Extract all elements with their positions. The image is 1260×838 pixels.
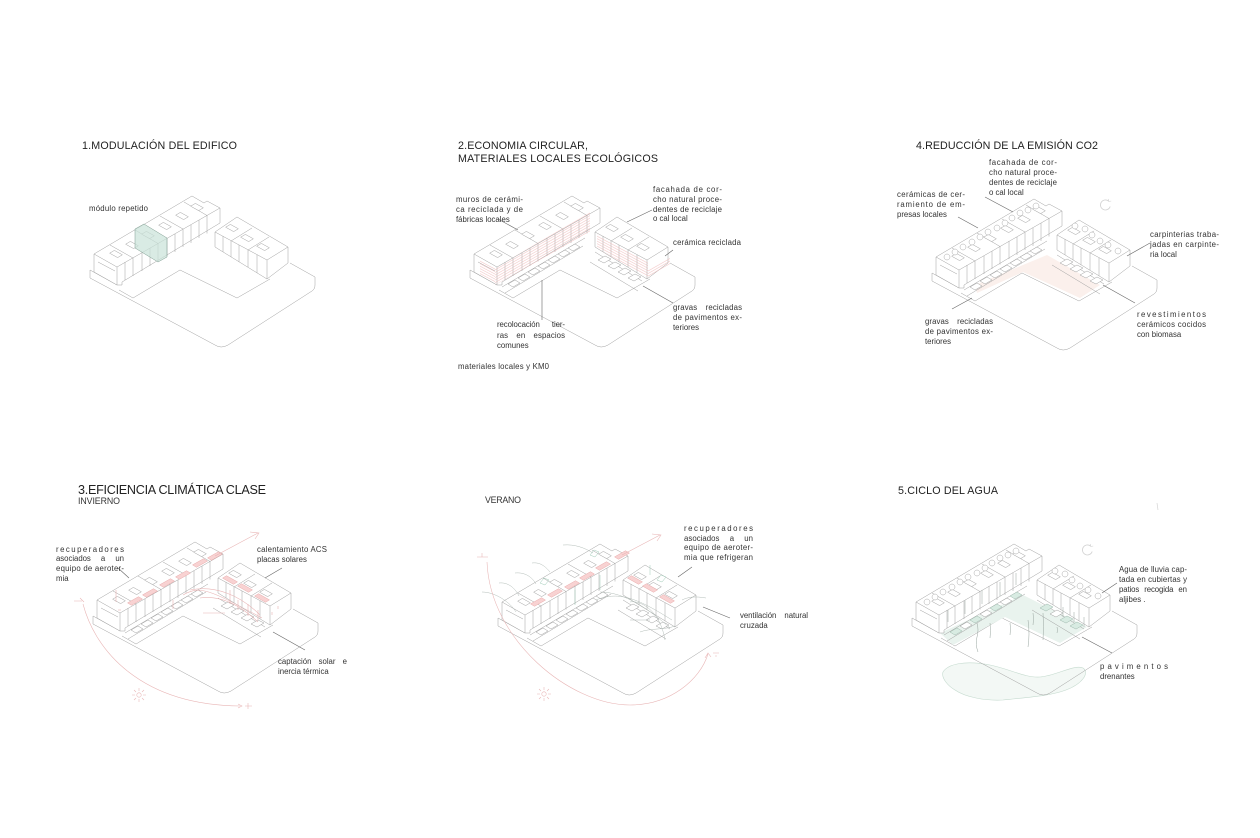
label: recuperadores: recuperadores (56, 545, 124, 554)
icon: sun (537, 687, 551, 701)
label: captación solar: inercia térmica (278, 667, 329, 676)
label: muros de cerámica: fábricas locales (456, 215, 510, 224)
label: gravas recicladas: teriores (673, 323, 699, 332)
label: fachada de corcho: facahada de cor- (653, 185, 722, 194)
label: revestimientos: revestimientos (1137, 310, 1206, 319)
label: revestimientos: cerámicos cocidos (1137, 320, 1206, 329)
label: cerámicas de cerramiento: cerámicas de cer- (897, 190, 965, 199)
panel: 2 economía circular (456, 140, 742, 371)
label: recolocación tierras: recolocación tier- (497, 320, 565, 329)
label: fachada de corcho: o cal local (653, 214, 688, 223)
heading: modulación: 1.MODULACIÓN DEL EDIFICO (82, 139, 237, 152)
label: gravas recicladas: teriores (925, 337, 951, 346)
arc: winter sun path (74, 598, 252, 709)
ventilation arrows (482, 545, 706, 640)
label: recolocación tierras: ras en espacios (497, 331, 565, 340)
panel: 3 eficiencia climática invierno (56, 482, 347, 709)
label: fachada de corcho: facahada de cor- (989, 158, 1057, 167)
label: muros de cerámica: muros de cerámi- (456, 195, 523, 204)
panel: 5 ciclo del agua (898, 485, 1187, 700)
label: fachada de corcho: o cal local (989, 188, 1024, 197)
rain drainage lines (948, 573, 1084, 652)
drawing: CO2 axonometric (932, 199, 1157, 350)
label: fachada de corcho: dentes de reciclaje (653, 205, 722, 214)
drawing: summer axonometric (498, 544, 723, 695)
drawing: materials axonometric (470, 196, 695, 347)
subheading: invierno: INVIERNO (78, 496, 120, 506)
drawing: axonometric building (90, 196, 315, 347)
label: recolocación tierras (497, 320, 565, 350)
heading: eficiencia climática: 3.EFICIENCIA CLIMÁTICA CLASE (78, 482, 266, 497)
label: recuperadores (684, 524, 753, 562)
label: agua de lluvia: Agua de lluvia cap- (1119, 565, 1187, 574)
drawing: water axonometric (912, 544, 1137, 695)
label: fachada de corcho (653, 185, 722, 223)
label: agua de lluvia (1119, 565, 1187, 604)
label: recuperadores (56, 545, 124, 583)
leader lines (498, 210, 673, 320)
icon: recycle arrow (1100, 199, 1111, 210)
label: ventilación: ventilación natural (740, 611, 808, 620)
leader lines (118, 568, 305, 650)
label: fachada de corcho: dentes de reciclaje (989, 178, 1057, 187)
label: cerámicas de cerramiento: presas locales (897, 210, 947, 219)
label: gravas recicladas (673, 303, 742, 332)
shape: aquifer blob (943, 663, 1086, 700)
label: muros de cerámica (456, 195, 523, 224)
label: agua de lluvia: patios recogida en (1119, 585, 1187, 594)
label: gravas recicladas: de pavimentos ex- (673, 313, 742, 322)
label: recolocación tierras: comunes (497, 341, 529, 350)
label: carpinterías: ria local (1150, 250, 1177, 259)
label: ventilación: cruzada (740, 621, 768, 630)
label: calentamiento ACS: placas solares (257, 555, 307, 564)
leader lines (1082, 583, 1117, 653)
arc: summer sun path (477, 553, 719, 705)
label: revestimientos: con biomasa (1137, 330, 1182, 339)
leader lines (678, 567, 730, 618)
label: carpinterías: jadas en carpinte- (1149, 240, 1219, 249)
label: recuperadores: recuperadores (684, 524, 753, 533)
label: revestimientos (1137, 310, 1206, 339)
label: fachada de corcho: cho natural proce- (653, 195, 722, 204)
green patios (950, 592, 1083, 635)
heading: economía circular: 2.ECONOMIA CIRCULAR, (458, 140, 588, 152)
label: recuperadores: equipo de aeroter- (684, 543, 753, 552)
label: muros de cerámica: ca reciclada y de (456, 205, 523, 214)
label: cerámica reciclada: cerámica reciclada (673, 238, 742, 247)
label: módulo repetido: módulo repetido (89, 204, 149, 213)
heading: reducción CO2: 4.REDUCCIÓN DE LA EMISIÓN CO2 (916, 139, 1098, 152)
label: pavimentos drenantes (1100, 662, 1168, 681)
leader lines (952, 197, 1150, 309)
highlighted green module (135, 224, 167, 262)
label: pavimentos drenantes: pavimentos (1100, 662, 1168, 671)
label: fachada de corcho (989, 158, 1057, 197)
label: cerámicas de cerramiento: ramiento de em- (897, 200, 965, 209)
heading: economía circular: MATERIALES LOCALES ECOLÓGICOS (458, 152, 658, 165)
label: gravas recicladas: gravas recicladas (673, 303, 742, 312)
label: carpinterías: carpinterias traba- (1150, 230, 1219, 239)
label: recuperadores: mia (56, 574, 69, 583)
label: cerámicas de cerramiento (897, 190, 965, 219)
drawing: winter axonometric (93, 542, 318, 693)
label: calentamiento ACS (257, 545, 327, 564)
red solar panels (116, 532, 278, 622)
label: agua de lluvia: tada en cubiertas y (1119, 575, 1187, 584)
panel: 4 reducción emisión CO2 (897, 139, 1219, 350)
label: gravas recicladas: de pavimentos ex- (925, 327, 993, 336)
label: calentamiento ACS: calentamiento ACS (257, 545, 327, 554)
label: recuperadores: mia que refrigeran (684, 553, 753, 562)
heading: ciclo del agua: 5.CICLO DEL AGUA (898, 485, 999, 497)
panel: verano (477, 495, 808, 705)
label: gravas recicladas (925, 317, 993, 346)
small mark (1157, 503, 1158, 510)
label: carpinterías (1149, 230, 1219, 259)
label: gravas recicladas: gravas recicladas (925, 317, 993, 326)
icon: sun (132, 688, 146, 702)
label: recuperadores: equipo de aeroter- (56, 564, 124, 573)
label: ventilación (740, 611, 808, 630)
label: materiales locales: materiales locales y KM0 (458, 362, 550, 371)
red and green units (530, 534, 674, 606)
icon: water cycle arrow (1082, 544, 1093, 555)
subheading: verano: VERANO (485, 495, 521, 505)
panel: 1 modulación del edificio (82, 139, 315, 347)
label: pavimentos drenantes: drenantes (1100, 672, 1135, 681)
label: recuperadores: asociados a un (684, 534, 753, 543)
label: captación solar (278, 657, 347, 676)
label: captación solar: captación solar e (278, 657, 347, 666)
heading: economía circular (458, 140, 658, 165)
label: agua de lluvia: aljibes . (1119, 595, 1145, 604)
label: recuperadores: asociados a un (56, 554, 124, 563)
label: fachada de corcho: cho natural proce- (989, 168, 1057, 177)
